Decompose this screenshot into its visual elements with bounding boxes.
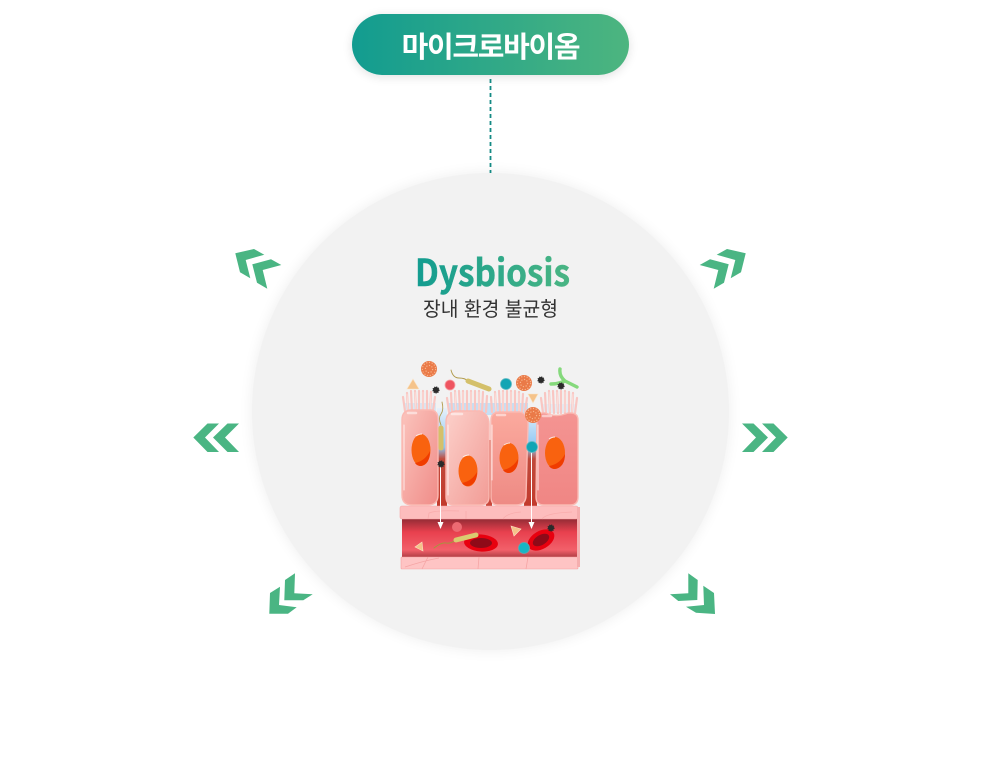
- blood vessel: [400, 506, 580, 569]
- green bacterium: [551, 369, 577, 387]
- cell nuclei: [412, 434, 565, 486]
- orange microbes: [421, 361, 541, 423]
- arrow: left: [193, 424, 239, 452]
- round particles: [445, 378, 538, 554]
- illustration: intestinal wall and blood vessel: [400, 361, 580, 569]
- epithelial cells: [402, 410, 578, 505]
- microvilli: [403, 391, 577, 413]
- triangle particles: [407, 379, 538, 551]
- subtitle: 장내 환경 불균형: [423, 293, 558, 322]
- title pill: microbiome: 마이크로바이옴: [402, 24, 579, 66]
- heading: Dysbiosis: Dysbiosis: [415, 243, 570, 297]
- arrow: top right: [700, 249, 746, 289]
- arrow: bottom left: [269, 573, 313, 614]
- arrow: bottom right: [670, 573, 715, 614]
- rod bacteria: [434, 370, 489, 548]
- arrow: right: [742, 424, 788, 452]
- cell highlights: [404, 413, 551, 495]
- arrows into the bloodstream: [438, 452, 534, 529]
- red blood cells: [463, 525, 558, 555]
- black particles: [433, 377, 564, 531]
- title pill: microbiome: [352, 14, 629, 75]
- arrow: top left: [235, 249, 281, 289]
- background circle: [252, 173, 729, 650]
- gaps between cells: [404, 403, 576, 506]
- dashed connector line: [490, 79, 492, 173]
